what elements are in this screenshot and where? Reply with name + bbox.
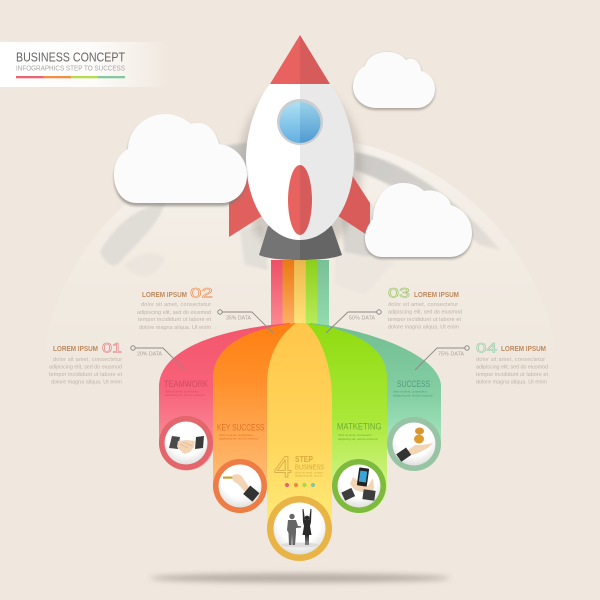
paragraph 04: tempor incididunt ut labore et xyxy=(476,372,548,378)
circle: hands with phone xyxy=(332,459,386,513)
label: 4 step business xyxy=(274,451,324,484)
ribbon: teamwork xyxy=(159,323,290,471)
title banner xyxy=(0,42,170,87)
circle: coins in hand xyxy=(387,417,441,471)
label: matketing: dolor sit amet, consectetur xyxy=(338,433,372,437)
connector 01 xyxy=(131,346,185,370)
cloud: right xyxy=(365,183,472,259)
icon: handshake xyxy=(169,436,204,454)
connector 04: 75% DATA xyxy=(438,352,465,358)
paragraph 02: dolor sit amet, consectetur xyxy=(141,302,211,308)
paragraph 03: dolor sit amet, consectetur xyxy=(388,302,458,308)
number 02: 02 xyxy=(190,284,213,300)
label: 4 step business: STEP xyxy=(295,455,314,464)
paragraph 01 xyxy=(49,357,122,386)
left fin xyxy=(229,172,262,237)
cloud: top right xyxy=(353,52,435,110)
rocket shadow xyxy=(238,82,362,258)
circle: key in hand xyxy=(213,459,267,513)
heading 03: LOREM IPSUM xyxy=(414,292,459,299)
block 03 xyxy=(388,284,462,330)
paragraph 02: adipiscing elit, sed do eiusmod xyxy=(137,310,211,316)
subtitle: INFOGRAPHICS STEP TO SUCCESS xyxy=(16,66,125,72)
rocket xyxy=(229,35,370,260)
heading 01: LOREM IPSUM xyxy=(53,346,98,353)
label: success: dolor sit amet, consectetur xyxy=(393,390,427,394)
label: 4 step business: dolor sit amet, consec xyxy=(295,470,324,474)
nozzle xyxy=(259,226,342,260)
connector 01: 20% DATA xyxy=(137,352,163,358)
block 04 xyxy=(476,340,548,386)
globe xyxy=(39,137,561,398)
label: matketing: adipiscing elit, sed do eiusmod xyxy=(338,437,378,441)
ribbon: marketing xyxy=(304,323,387,514)
label: 4 step business: adipiscing elit, sed do xyxy=(295,474,323,478)
label: matketing: MATKETING xyxy=(337,422,382,432)
number 01: 01 xyxy=(102,340,122,356)
label: teamwork xyxy=(164,379,209,397)
ribbon: step business xyxy=(267,323,332,560)
nose cone xyxy=(270,35,330,84)
connector 04 xyxy=(415,346,469,370)
window xyxy=(277,99,323,145)
ribbon: key success xyxy=(213,323,296,513)
label: matketing xyxy=(337,422,382,441)
paragraph 03 xyxy=(388,302,462,330)
circle: handshake xyxy=(159,416,213,470)
paragraph 03: dolore magna aliqua. Ut enim xyxy=(388,324,460,330)
flame emblem xyxy=(288,165,312,235)
label: success: adipiscing elit, sed do eiusmod xyxy=(393,394,433,398)
label: success xyxy=(393,379,433,398)
label: success: SUCCESS xyxy=(397,379,430,390)
label: teamwork: TEAMWORK xyxy=(164,379,209,390)
paragraph 02 xyxy=(137,302,212,331)
label: teamwork: dolor sit amet, consectetur xyxy=(165,390,199,394)
paragraph 01: tempor incididunt ut labore et xyxy=(49,372,122,378)
ground shadow xyxy=(150,574,450,582)
heading 04: LOREM IPSUM xyxy=(501,346,546,353)
paragraph 01: dolore magna aliqua. Ut enim xyxy=(51,380,122,386)
label: teamwork: adipiscing elit, sed do eiusmod xyxy=(165,393,205,397)
rocket exhaust stripes xyxy=(271,260,329,326)
title: BUSINESS CONCEPT xyxy=(16,50,125,64)
colour bar xyxy=(16,76,125,78)
paragraph 02: tempor incididunt ut labore et xyxy=(138,317,212,323)
icon: key and hand xyxy=(223,474,259,502)
cloud: left xyxy=(114,114,247,206)
label: 4 step business: 4 xyxy=(274,451,292,484)
connector 03 xyxy=(326,310,381,333)
label: key success: KEY SUCCESS xyxy=(217,422,264,434)
icon: business man and woman xyxy=(281,509,319,548)
heading 02: LOREM IPSUM xyxy=(142,292,187,299)
icon: hands holding phone xyxy=(341,467,376,501)
paragraph 04: dolor sit amet, consectetur xyxy=(476,357,545,363)
paragraph 01: dolor sit amet, consectetur xyxy=(53,357,122,363)
circle: people xyxy=(267,496,332,561)
paragraph 04 xyxy=(476,357,548,386)
number 03: 03 xyxy=(388,284,410,300)
paragraph 03: adipiscing elit, sed do eiusmod xyxy=(388,310,462,316)
paragraph 04: adipiscing elit, sed do eiusmod xyxy=(476,364,548,370)
connector 02 xyxy=(218,310,273,333)
body xyxy=(246,84,354,240)
paragraph 04: dolore magna aliqua. Ut enim xyxy=(476,380,548,386)
label: key success xyxy=(217,422,264,440)
right fin xyxy=(338,172,370,237)
paragraph 01: adipiscing elit, sed do eiusmod xyxy=(49,364,122,370)
ribbon: success xyxy=(310,323,441,470)
number 04: 04 xyxy=(476,340,497,356)
step dots xyxy=(285,483,315,487)
label: 4 step business: BUSINESS xyxy=(295,462,324,472)
connector 02: 35% DATA xyxy=(226,316,252,322)
label: key success: adipiscing elit, sed do eiusmod xyxy=(219,436,259,440)
paragraph 02: dolore magna aliqua. Ut enim xyxy=(139,325,212,331)
block 02 xyxy=(137,284,213,331)
paragraph 03: tempor incididunt ut labore et xyxy=(388,317,462,323)
label: key success: dolor sit amet, consectetur xyxy=(219,433,253,437)
icon: coins in hand xyxy=(396,428,433,462)
block 01 xyxy=(49,340,122,386)
connector 03: 50% DATA xyxy=(349,316,376,322)
